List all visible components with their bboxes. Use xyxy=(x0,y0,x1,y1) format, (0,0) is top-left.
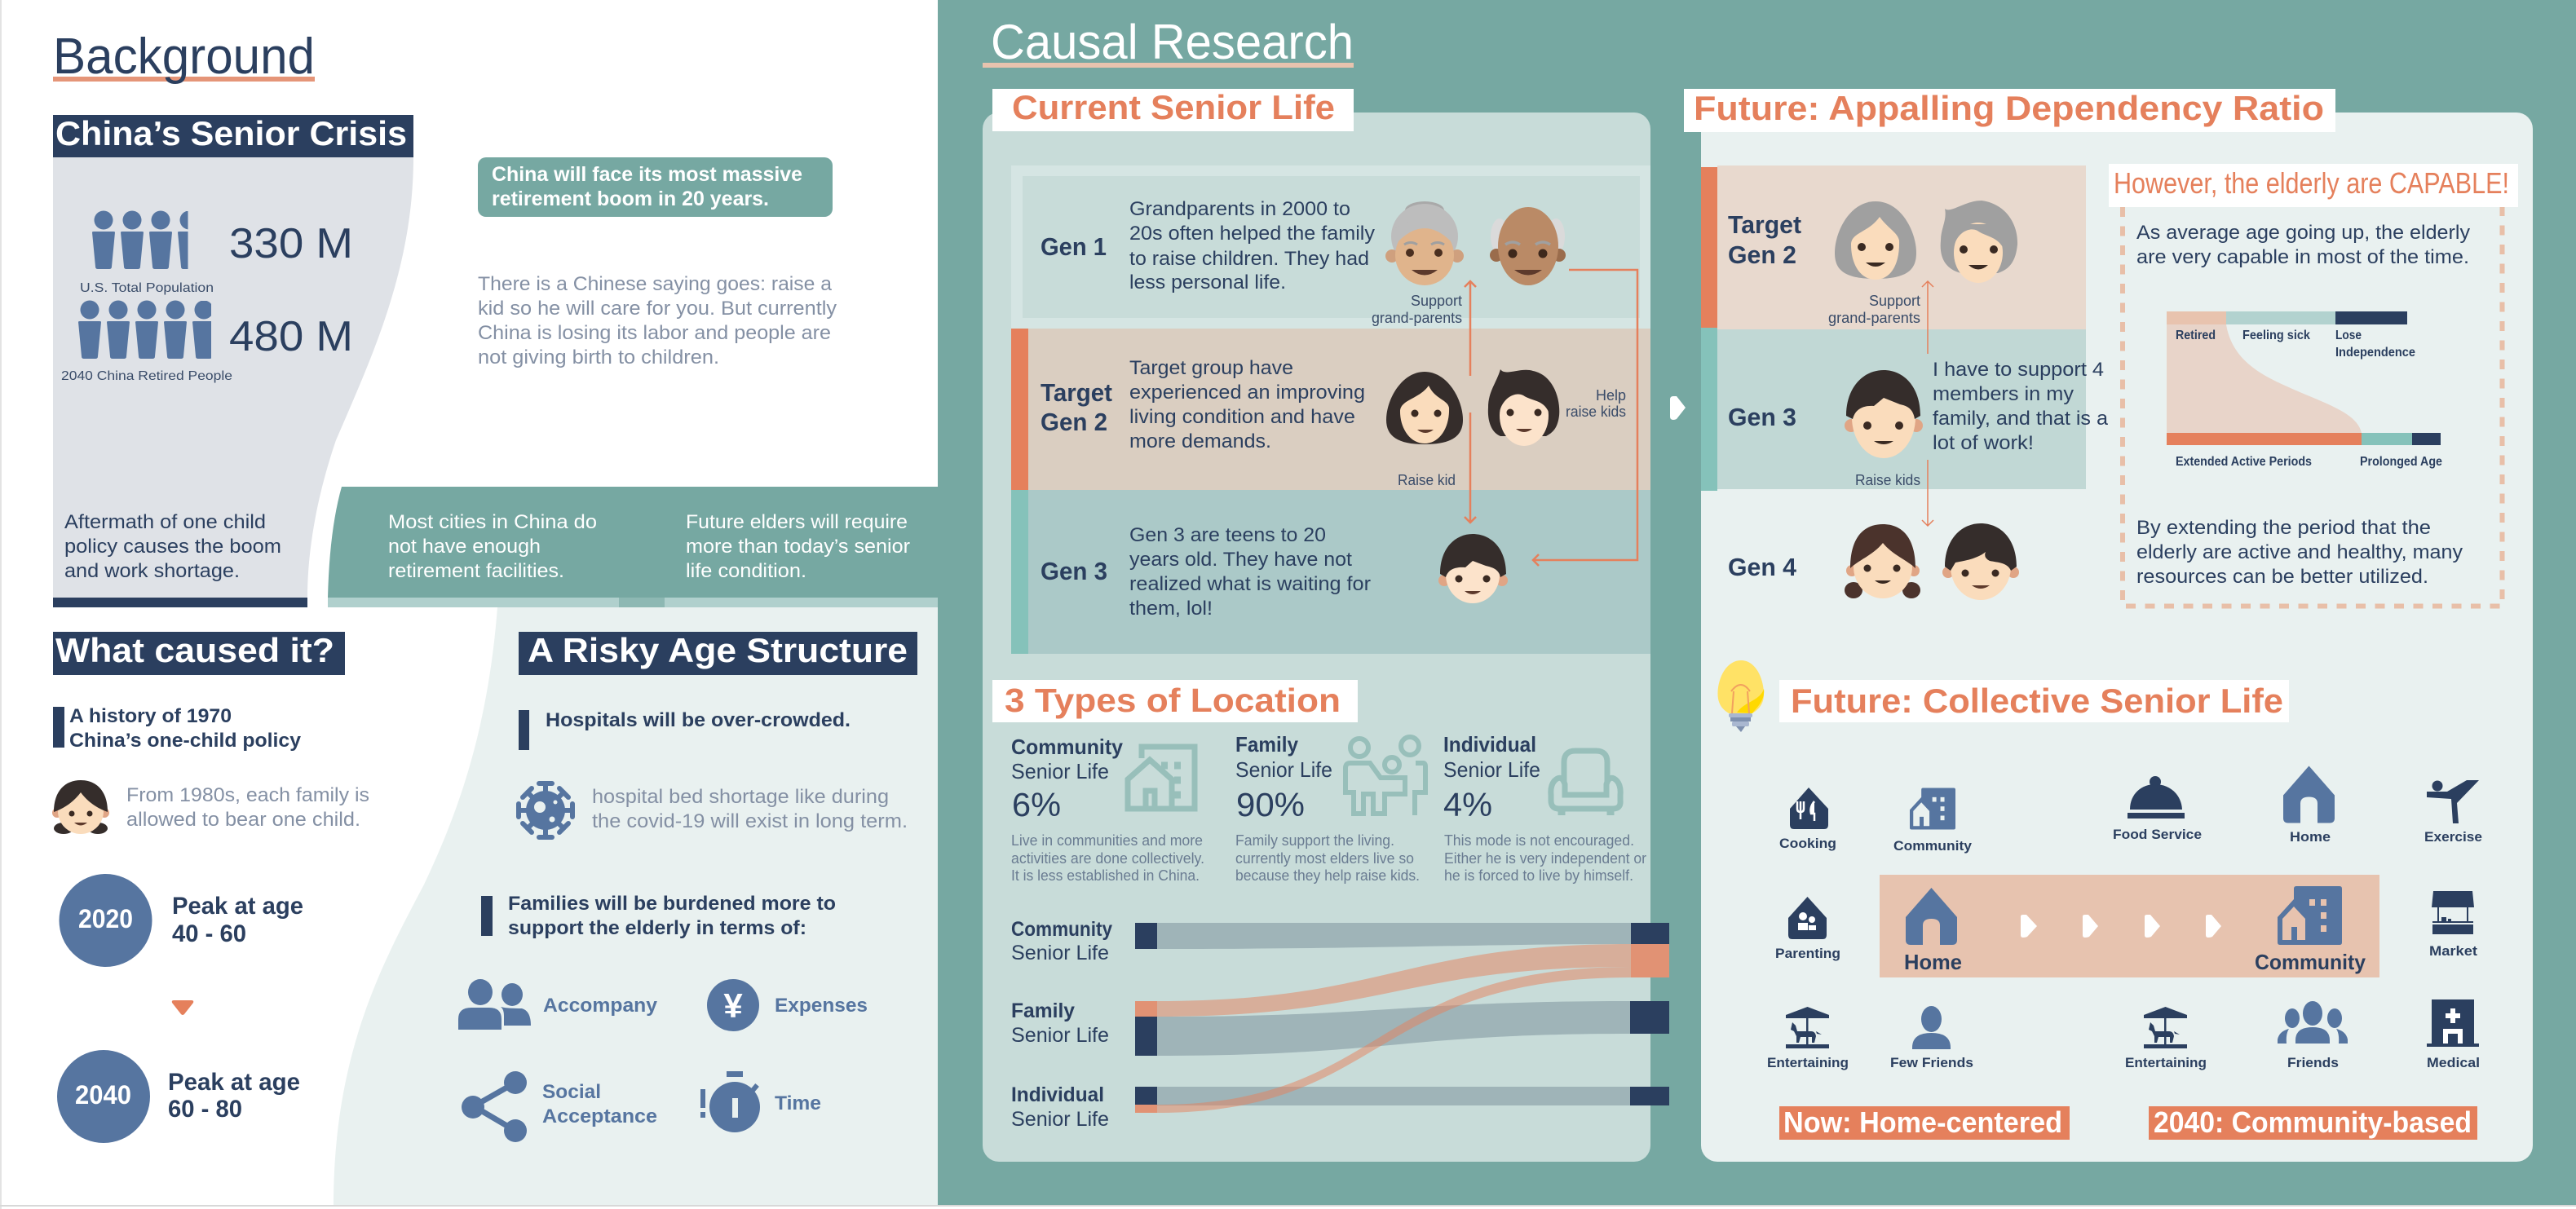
panel: causal research section xyxy=(983,15,2533,1162)
row: Gen 3 future xyxy=(1701,328,2086,491)
heading: Current Senior Life: Current Senior Life xyxy=(1012,88,1335,126)
label: food service: Food Service xyxy=(2113,827,2202,842)
stat: 2020 peak: 2020 xyxy=(78,904,133,933)
icon: entertaining carousel right xyxy=(2144,1007,2187,1048)
row: Gen 3: them, lol! xyxy=(1129,598,1213,620)
heading: However, the elderly are CAPABLE! xyxy=(2109,164,2518,207)
panel: risky age structure background xyxy=(334,607,938,1205)
stat: 2020 peak: 40 - 60 xyxy=(172,920,246,947)
label: entertaining left: Entertaining xyxy=(1767,1055,1849,1070)
label: accompany: Accompany xyxy=(543,995,658,1017)
heading: Future: Collective Senior Life: Future: Collective Senior Life xyxy=(1791,682,2283,720)
text: bed shortage: hospital bed shortage like during xyxy=(592,786,889,808)
icon: grandfather face xyxy=(1490,207,1566,285)
icon: entertaining carousel left xyxy=(1786,1007,1829,1048)
text: support 4 members: lot of work! xyxy=(1933,432,2034,454)
text: extending the period: elderly are active and healthy, many xyxy=(2136,541,2463,563)
icon: medical xyxy=(2427,999,2479,1047)
block: community senior life: Senior Life xyxy=(1011,759,1109,783)
icon: friends xyxy=(2278,1001,2348,1044)
icon: retired people xyxy=(78,300,215,359)
label: support grand-parents xyxy=(1372,293,1462,326)
labels: sankey row names: Family xyxy=(1011,999,1075,1022)
block: community senior life: 6% xyxy=(1012,786,1061,823)
row: Target Gen 2: Target group have xyxy=(1129,357,1293,379)
block: individual senior life: Either he is very independent or xyxy=(1444,850,1646,867)
labels: sankey row names: Individual xyxy=(1011,1083,1104,1106)
panel: future dependency and collective life xyxy=(1684,89,2533,1162)
arrow: support grand-parents xyxy=(1465,281,1476,376)
stat: 480 M: 480 M xyxy=(229,313,353,360)
label: raise kids future: Raise kids xyxy=(1855,472,1920,488)
icon: gen 3 boy face xyxy=(1845,370,1923,458)
text: extending the period xyxy=(2136,517,2463,588)
label: entertaining right: Entertaining xyxy=(2125,1055,2207,1070)
row: Gen 1: to raise children. They had xyxy=(1129,248,1369,270)
heading: 3 Types of Location: 3 Types of Location xyxy=(1005,682,1341,719)
label: cooking: Cooking xyxy=(1779,836,1836,851)
text: Chinese saying: kid so he will care for you. But currently xyxy=(478,298,837,320)
label: social acceptance: Social xyxy=(542,1081,601,1103)
text: retirement facilities: Most cities in China do xyxy=(388,511,597,533)
block: family senior life xyxy=(1235,732,1420,884)
row: Gen 3 xyxy=(1011,490,1650,654)
caption: U.S. Total Population: U.S. Total Population xyxy=(80,281,214,295)
block: individual senior life xyxy=(1443,732,1646,884)
tag: Now Home-centered: Now: Home-centered xyxy=(1783,1105,2062,1139)
text: Chinese saying xyxy=(478,273,837,368)
row: Target Gen 2: Target xyxy=(1041,378,1112,407)
icon: woman face xyxy=(1386,372,1463,444)
icon: girl face xyxy=(52,780,109,834)
row: Gen 1: 20s often helped the family xyxy=(1129,223,1375,245)
text: hospitals over-crowded: Hospitals will be over-crowded. xyxy=(546,709,851,731)
block: community senior life: It is less established in China. xyxy=(1011,867,1200,884)
text: average age: As average age going up, the elderly xyxy=(2136,222,2470,244)
arrow: between panels xyxy=(1670,396,1686,420)
text: extending the period: resources can be better utilized. xyxy=(2136,566,2428,588)
callout: retirement boom: China will face its most massive xyxy=(492,163,802,186)
row: Gen 3: Gen 3 are teens to 20 xyxy=(1129,524,1326,546)
text: average age: are very capable in most of the time. xyxy=(2136,246,2469,268)
block: community senior life: activities are done collectively. xyxy=(1011,850,1204,867)
text: one child rule: allowed to bear one child. xyxy=(126,809,360,831)
label: social acceptance xyxy=(542,1081,657,1127)
text: average age xyxy=(2136,222,2470,268)
panel: capable elderly dashed box xyxy=(2109,164,2518,607)
tag: 2040 Community-based: 2040: Community-based xyxy=(2154,1105,2472,1139)
text: families burdened xyxy=(481,893,836,939)
row: Gen 1: Grandparents in 2000 to xyxy=(1129,198,1350,220)
panel: a risky age structure xyxy=(458,631,917,1142)
icon: food service cloche xyxy=(2128,776,2185,819)
callout: retirement boom: retirement boom in 20 years. xyxy=(492,188,769,210)
label: few friends: Few Friends xyxy=(1890,1055,1973,1070)
row: Target Gen 2: experienced an improving xyxy=(1129,382,1365,404)
text: retirement facilities xyxy=(388,511,597,582)
icon: man face xyxy=(1488,369,1559,446)
icon: accompany xyxy=(458,979,531,1030)
icon: grandmother face xyxy=(1385,201,1464,285)
label: help raise kids: raise kids xyxy=(1566,404,1626,420)
chart: extended active period xyxy=(2167,311,2442,469)
label: home top: Home xyxy=(2290,829,2331,845)
label: social acceptance: Acceptance xyxy=(542,1105,657,1127)
row: Gen 1: Gen 1 xyxy=(1041,232,1107,261)
block: family senior life: 90% xyxy=(1236,786,1305,823)
block: individual senior life: Individual xyxy=(1443,732,1536,757)
row: Target Gen 2 future xyxy=(1701,165,2086,329)
label: expenses: Expenses xyxy=(775,995,868,1017)
label: parenting: Parenting xyxy=(1775,946,1840,961)
text: aftermath xyxy=(64,511,281,582)
label: support grand-parents future xyxy=(1828,293,1920,326)
block: individual senior life: This mode is not encouraged. xyxy=(1444,832,1634,849)
arrow: raise kids future xyxy=(1922,460,1933,526)
arrow: support grand-parents future xyxy=(1922,281,1933,354)
stat: 2020 peak xyxy=(59,874,303,967)
row: Gen 3: realized what is waiting for xyxy=(1129,573,1371,595)
icon: older woman face xyxy=(1835,201,1916,280)
text: retirement facilities: not have enough xyxy=(388,536,541,558)
icon: expenses yen: ¥ xyxy=(723,986,743,1025)
panel: current senior life xyxy=(983,88,1669,1162)
block: family senior life: currently most elders live so xyxy=(1235,850,1414,867)
text: future elders xyxy=(686,511,910,582)
icon: older man face xyxy=(1941,201,2017,283)
icon: parenting xyxy=(1788,897,1827,939)
heading: A Risky Age Structure: A Risky Age Structure xyxy=(528,631,908,669)
text: bed shortage xyxy=(592,786,908,832)
row: Gen 3: Gen 3 xyxy=(1041,557,1107,585)
text: families burdened: support the elderly in terms of: xyxy=(508,917,806,939)
row: Gen 3 future: Gen 3 xyxy=(1728,403,1796,431)
chart: extended active period: Prolonged Age xyxy=(2360,455,2442,469)
icon: community building xyxy=(1128,747,1195,809)
row: Target Gen 2: living condition and have xyxy=(1129,406,1355,428)
chart: extended active period: Extended Active Periods xyxy=(2176,455,2312,469)
block: family senior life: Family support the living. xyxy=(1235,832,1394,849)
panel: home to community transition xyxy=(1880,875,2379,977)
text: support 4 members: I have to support 4 xyxy=(1933,359,2104,381)
heading: What caused it?: What caused it? xyxy=(55,631,334,669)
text: aftermath: policy causes the boom xyxy=(64,536,281,558)
stat: 330 M: 330 M xyxy=(229,220,353,267)
stat: 2040 peak: 2040 xyxy=(75,1080,131,1110)
text: bed shortage: the covid-19 will exist in long term. xyxy=(592,810,908,832)
label: support grand-parents: Support xyxy=(1411,293,1462,309)
text: support 4 members: family, and that is a xyxy=(1933,408,2109,430)
row: Target Gen 2 future: Target xyxy=(1728,210,1801,239)
heading: However, the elderly are CAPABLE!: However, the elderly are CAPABLE! xyxy=(2114,166,2509,200)
labels: sankey row names: Senior Life xyxy=(1011,1024,1109,1047)
icon: U.S. population people xyxy=(92,210,201,269)
label: support grand-parents future: Support xyxy=(1869,293,1920,309)
icon: community small xyxy=(1910,788,1955,830)
row: Gen 3: years old. They have not xyxy=(1129,549,1352,571)
labels: sankey row names: Senior Life xyxy=(1011,1108,1109,1131)
icon: home large xyxy=(1906,888,1957,945)
arrow: raise kid xyxy=(1465,413,1476,523)
text: support 4 members: members in my xyxy=(1933,383,2074,405)
text: retirement facilities: retirement facilities. xyxy=(388,560,564,582)
text: families burdened: Families will be burdened more to xyxy=(508,893,836,915)
label: market: Market xyxy=(2429,943,2477,959)
arrows: transition chevrons xyxy=(2021,915,2221,938)
labels: sankey row names: Community xyxy=(1011,918,1112,941)
row: Target Gen 2 xyxy=(1011,329,1650,490)
icon: light bulb xyxy=(1717,660,1764,732)
row: Target Gen 2: more demands. xyxy=(1129,430,1271,452)
row: Gen 1: less personal life. xyxy=(1129,271,1286,293)
text: support 4 members xyxy=(1933,359,2109,454)
icon: community large xyxy=(2278,886,2342,945)
text: extending the period: By extending the period that the xyxy=(2136,517,2431,539)
label: Gen 4: Gen 4 xyxy=(1728,553,1797,581)
row: Gen 1 xyxy=(1011,165,1650,329)
icon: market stall xyxy=(2432,891,2474,934)
text: aftermath: Aftermath of one child xyxy=(64,511,266,533)
label: home large: Home xyxy=(1904,950,1962,974)
stat: 2020 peak: Peak at age xyxy=(172,893,303,920)
panel: teal facts band xyxy=(328,487,938,607)
icon: exercise xyxy=(2427,780,2479,823)
icon: gen 4 girl face xyxy=(1845,524,1920,598)
row: Target Gen 2 future: Gen 2 xyxy=(1728,240,1796,269)
label: help raise kids: Help xyxy=(1596,387,1626,404)
icon: home top xyxy=(2283,766,2335,823)
label: community large: Community xyxy=(2255,950,2366,974)
block: individual senior life: he is forced to live by himself. xyxy=(1444,867,1633,884)
label: exercise: Exercise xyxy=(2424,829,2482,845)
panel: China's Senior Crisis xyxy=(53,114,413,607)
icon: boy face xyxy=(1438,534,1508,603)
title: Background: Background xyxy=(53,29,315,85)
heading: Future: Appalling Dependency Ratio: Future: Appalling Dependency Ratio xyxy=(1694,89,2324,127)
block: individual senior life: Senior Life xyxy=(1443,757,1540,782)
icon: virus xyxy=(519,783,572,837)
icon: few friends xyxy=(1912,1006,1951,1049)
chart: extended active period: Feeling sick xyxy=(2242,329,2310,342)
label: community small: Community xyxy=(1893,838,1973,854)
panel: what caused it xyxy=(52,631,369,1143)
label: friends: Friends xyxy=(2287,1055,2339,1070)
label: support grand-parents: grand-parents xyxy=(1372,310,1462,326)
text: one child rule: From 1980s, each family is xyxy=(126,784,369,806)
icon: cooking xyxy=(1790,788,1828,829)
block: community senior life: Live in communities and more xyxy=(1011,832,1203,849)
stat: 2040 peak: 60 - 80 xyxy=(168,1096,242,1123)
chart: extended active period: Independence xyxy=(2335,346,2415,360)
stat: 2040 peak xyxy=(57,1050,300,1143)
text: history of one-child policy xyxy=(53,705,302,752)
panel: background section xyxy=(52,29,938,1205)
title: Causal Research: Causal Research xyxy=(991,15,1354,69)
icon: expenses yen xyxy=(707,979,759,1031)
block: community senior life: Community xyxy=(1011,735,1124,759)
row: Target Gen 2: Gen 2 xyxy=(1041,408,1107,436)
label: medical: Medical xyxy=(2427,1055,2480,1070)
callout: retirement boom xyxy=(478,157,833,217)
text: hospitals over-crowded xyxy=(519,709,851,750)
icon: time stopwatch xyxy=(700,1071,760,1132)
text: Chinese saying: China is losing its labor and people are xyxy=(478,322,831,344)
text: future elders: life condition. xyxy=(686,560,806,582)
text: Chinese saying: There is a Chinese saying goes: raise a xyxy=(478,273,833,295)
text: future elders: Future elders will require xyxy=(686,511,908,533)
text: history of one-child policy: A history of 1970 xyxy=(69,705,232,727)
block: family senior life: because they help raise kids. xyxy=(1235,867,1420,884)
chart: extended active period: Retired xyxy=(2176,329,2216,342)
label: help raise kids xyxy=(1566,387,1626,420)
icon: family xyxy=(1345,737,1425,815)
chart: extended active period: Lose xyxy=(2335,329,2362,342)
block: family senior life: Senior Life xyxy=(1235,757,1332,782)
text: history of one-child policy: China’s one-child policy xyxy=(69,730,302,752)
text: Chinese saying: not giving birth to children. xyxy=(478,346,719,368)
block: community senior life xyxy=(1011,735,1204,884)
label: raise kid: Raise kid xyxy=(1398,472,1456,488)
label: time: Time xyxy=(775,1092,821,1114)
label: support grand-parents future: grand-parents xyxy=(1828,310,1920,326)
icon: armchair xyxy=(1551,751,1620,815)
icon: social share xyxy=(462,1071,527,1142)
caption: 2040 China Retired People: 2040 China Retired People xyxy=(61,369,232,383)
text: one child rule xyxy=(126,784,369,831)
text: aftermath: and work shortage. xyxy=(64,560,240,582)
labels: sankey row names: Senior Life xyxy=(1011,942,1109,964)
arrow: help raise kids xyxy=(1533,270,1637,566)
block: individual senior life: 4% xyxy=(1443,786,1492,823)
heading: China's Senior Crisis: China’s Senior Crisis xyxy=(55,114,407,152)
text: future elders: more than today’s senior xyxy=(686,536,910,558)
block: family senior life: Family xyxy=(1235,732,1298,757)
icon: gen 4 boy face xyxy=(1942,523,2019,600)
arrow: down triangle xyxy=(172,1000,193,1015)
stat: 2040 peak: Peak at age xyxy=(168,1069,300,1096)
chart: sankey flow between locations xyxy=(1011,918,1669,1131)
labels: sankey row names xyxy=(1011,918,1112,1131)
